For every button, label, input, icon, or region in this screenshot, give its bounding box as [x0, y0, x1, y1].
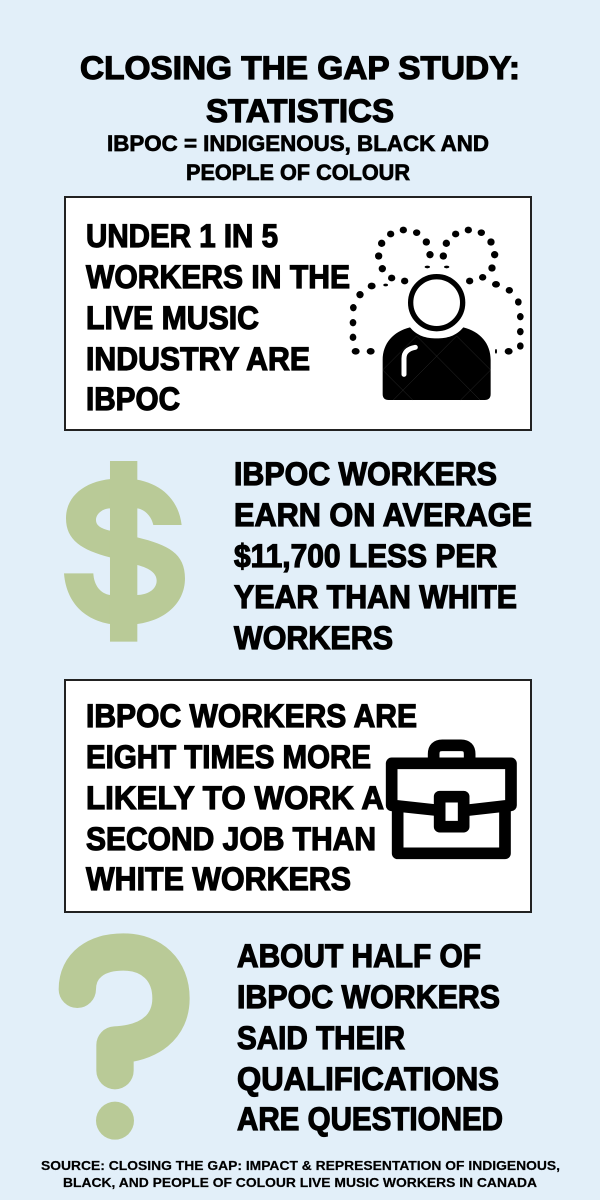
text: eight times more likely: LIKELY TO WORK A [86, 780, 384, 816]
text: under 1 in 5 statistic [86, 218, 350, 417]
title: CLOSING THE GAP STUDY: [80, 50, 520, 86]
text: qualifications statistic: IBPOC WORKERS [237, 979, 500, 1015]
text: under 1 in 5 statistic: UNDER 1 IN 5 [86, 218, 278, 254]
text: qualifications statistic [237, 938, 503, 1137]
text: earnings gap statistic: YEAR THAN WHITE [234, 579, 517, 615]
panel: under 1 in 5 workers [65, 197, 531, 430]
text: under 1 in 5 statistic: INDUSTRY ARE [86, 341, 310, 377]
text: under 1 in 5 statistic: IBPOC [86, 381, 180, 417]
text: under 1 in 5 statistic: LIVE MUSIC [86, 300, 259, 336]
title [80, 50, 520, 129]
text: qualifications statistic: ARE QUESTIONED [237, 1101, 503, 1137]
text: earnings gap statistic: EARN ON AVERAGE [234, 497, 532, 533]
text: qualifications statistic: SAID THEIR [237, 1020, 405, 1056]
icon: question mark [77, 952, 171, 1140]
text: earnings gap statistic: IBPOC WORKERS [234, 456, 497, 492]
subtitle: IBPOC definition: IBPOC = INDIGENOUS, BLACK AND [107, 131, 489, 156]
text: eight times more likely: IBPOC WORKERS ARE [86, 698, 417, 734]
icon: dollar sign [64, 461, 185, 642]
subtitle: IBPOC definition: PEOPLE OF COLOUR [186, 160, 410, 185]
text: qualifications statistic: QUALIFICATIONS [237, 1061, 499, 1097]
text: qualifications statistic: ABOUT HALF OF [237, 938, 481, 974]
title: STATISTICS [206, 93, 394, 129]
source note: SOURCE: CLOSING THE GAP: IMPACT & REPRESENTATION OF INDIGENOUS, [41, 1159, 560, 1173]
text: eight times more likely: SECOND JOB THAN [86, 821, 376, 857]
text: eight times more likely: WHITE WORKERS [86, 861, 351, 897]
text: earnings gap statistic [234, 456, 532, 656]
text: eight times more likely: EIGHT TIMES MORE [86, 739, 371, 775]
source note [41, 1159, 560, 1190]
icon: briefcase [392, 745, 511, 853]
text: earnings gap statistic: WORKERS [234, 620, 393, 656]
text: earnings gap statistic: $11,700 LESS PER [234, 538, 497, 574]
text: eight times more likely [86, 698, 417, 897]
source note: BLACK, AND PEOPLE OF COLOUR LIVE MUSIC WORKERS IN CANADA [63, 1176, 537, 1190]
icon: person with dotted group [350, 227, 524, 400]
text: under 1 in 5 statistic: WORKERS IN THE [86, 259, 350, 295]
panel: second job statistic [65, 680, 531, 912]
subtitle: IBPOC definition [107, 131, 489, 185]
